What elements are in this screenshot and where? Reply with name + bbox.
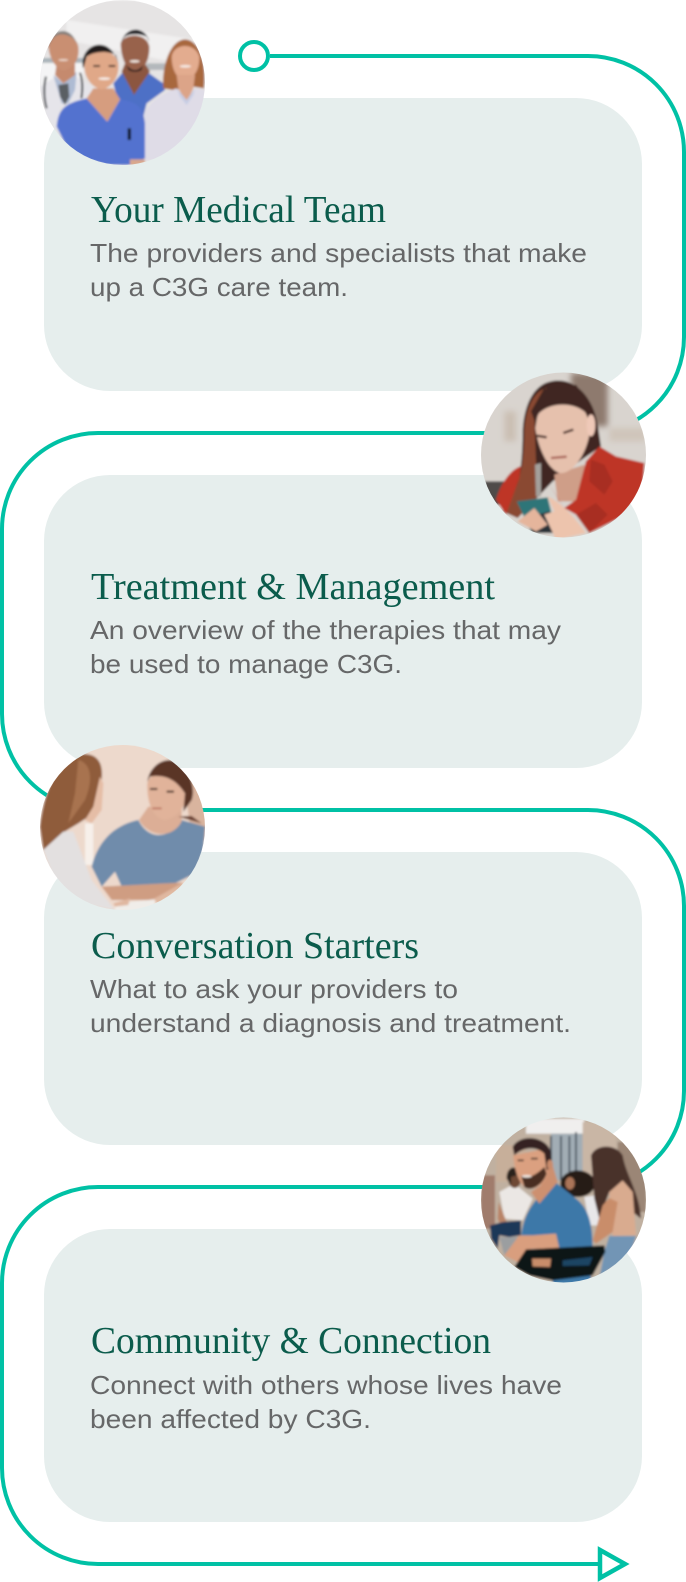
photo: patient conversation (40, 745, 205, 910)
panel: treatment and management (44, 475, 642, 768)
text: your medical team line 2: up a C3G care team. (90, 272, 348, 302)
panel: conversation starters (44, 852, 642, 1145)
text: conversation line 1: What to ask your providers to (90, 974, 458, 1004)
panel: your medical team (44, 98, 642, 391)
photo: woman with phone (481, 372, 646, 538)
text: conversation line 2: understand a diagnosis and treatment. (90, 1008, 571, 1038)
text: treatment line 1: An overview of the therapies that may (90, 615, 561, 645)
heading: treatment and management: Treatment & Management (91, 566, 495, 608)
photo: medical team (40, 0, 205, 165)
text: your medical team line 1: The providers and specialists that make (90, 238, 587, 268)
text: community line 2: been affected by C3G. (90, 1404, 371, 1434)
icon: start circle (240, 42, 268, 70)
heading: your medical team: Your Medical Team (91, 189, 386, 231)
text: community line 1: Connect with others whose lives have (90, 1370, 562, 1400)
heading: conversation starters: Conversation Starters (91, 925, 419, 967)
heading: community and connection: Community & Connection (91, 1320, 491, 1362)
arrow: end triangle (600, 1550, 625, 1578)
panel: community and connection (44, 1229, 642, 1522)
photo: support group (481, 1118, 646, 1282)
text: treatment line 2: be used to manage C3G. (90, 649, 402, 679)
